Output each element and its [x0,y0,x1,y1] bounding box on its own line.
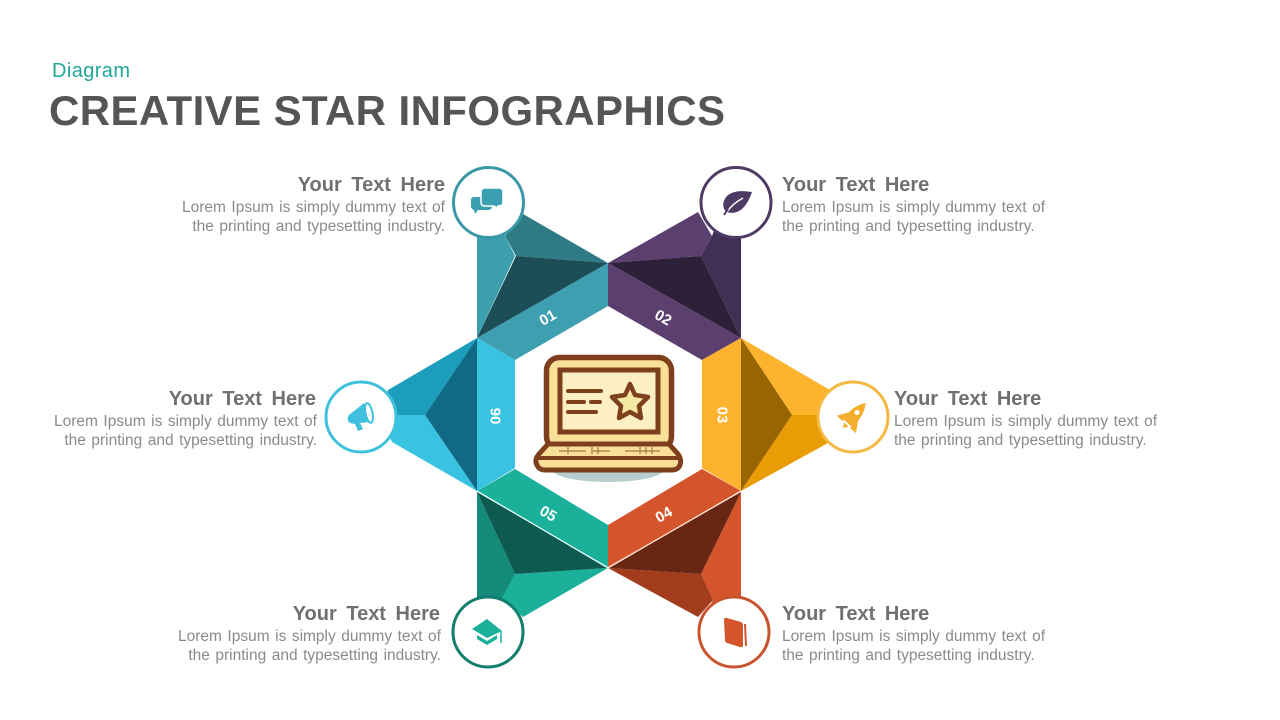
panel: star arm 06 [380,338,515,491]
text block 03 [894,388,1158,449]
text block 05 [178,603,442,664]
text block 03: the printing and typesetting industry. [894,432,1147,449]
panel: star arm 05: 05 [537,502,559,526]
subtitle: Diagram [52,60,130,82]
text block 05: the printing and typesetting industry. [188,647,441,664]
icon circle: graduation cap [453,597,523,667]
text block 06: Your Text Here [169,388,316,410]
text block 01: the printing and typesetting industry. [192,218,445,235]
icon circle: leaf [701,168,771,238]
text block 03: Lorem Ipsum is simply dummy text of [894,413,1158,430]
panel: star arm 06: 06 [488,408,504,424]
text block 01: Lorem Ipsum is simply dummy text of [182,199,446,216]
text block 04 [782,603,1046,664]
text block 04: Lorem Ipsum is simply dummy text of [782,628,1046,645]
panel: star arm 05 [477,469,608,620]
text block 04: Your Text Here [782,603,929,625]
text block 04: the printing and typesetting industry. [782,647,1035,664]
text block 02 [782,174,1046,235]
icon circle: chat bubbles [454,168,524,238]
text block 01: Your Text Here [298,174,445,196]
text block 06 [54,388,318,449]
icon circle: rocket [818,382,888,452]
text block 02: the printing and typesetting industry. [782,218,1035,235]
panel: star arm 03 [702,338,835,491]
title: CREATIVE STAR INFOGRAPHICS [49,87,725,134]
icon: laptop with star [536,358,681,482]
text block 01 [182,174,446,235]
panel: star arm 01 [477,214,608,360]
text block 03: Your Text Here [894,388,1041,410]
panel: star arm 02: 02 [652,306,674,330]
text block 06: Lorem Ipsum is simply dummy text of [54,413,318,430]
panel: star arm 04: 04 [653,503,676,527]
panel: star arm 01: 01 [537,306,559,330]
icon circle: book [699,597,769,667]
panel: star arm 03: 03 [714,407,730,423]
text block 06: the printing and typesetting industry. [64,432,317,449]
text block 02: Lorem Ipsum is simply dummy text of [782,199,1046,216]
panel: star arm 02 [608,212,741,360]
text block 05: Lorem Ipsum is simply dummy text of [178,628,442,645]
text block 05: Your Text Here [293,603,440,625]
panel: star arm 04 [608,469,741,625]
icon circle: megaphone [326,382,396,452]
text block 02: Your Text Here [782,174,929,196]
